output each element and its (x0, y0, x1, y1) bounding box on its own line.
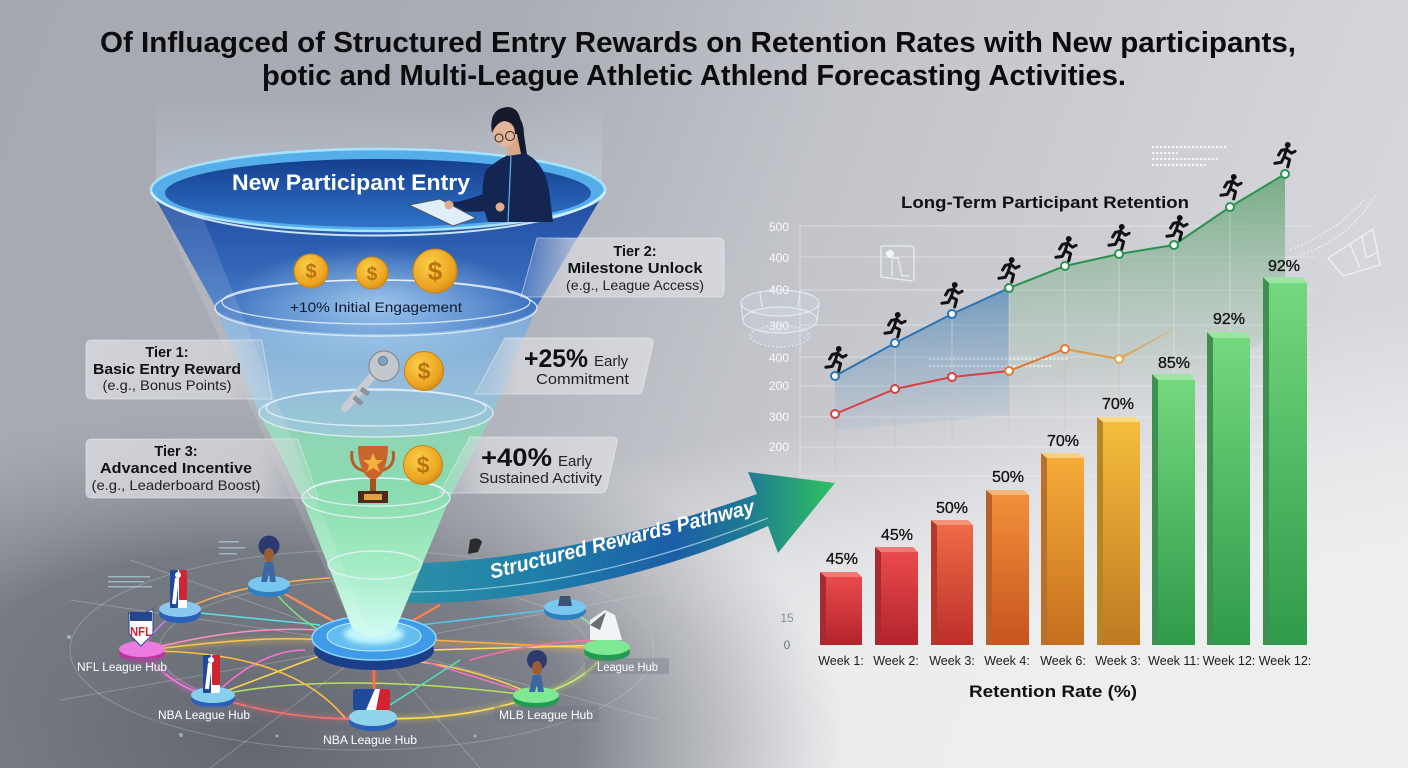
callout: 25 percent: +25% (524, 345, 588, 373)
x axis title: Retention Rate (%) (969, 682, 1137, 701)
runner icons (826, 142, 1295, 371)
axis tick labels: 200 (769, 379, 789, 393)
bar week 9 (1263, 277, 1307, 645)
week axis labels: Week 6: (1040, 654, 1086, 668)
dot sparkles (67, 541, 476, 738)
radar rings (60, 550, 670, 768)
bar value labels: 92% (1268, 258, 1300, 275)
bar value labels: 70% (1102, 396, 1134, 413)
axis tick labels (769, 220, 794, 652)
hub: right green (584, 610, 669, 674)
funnel middle blue section (215, 306, 537, 437)
funnel rim (151, 149, 605, 231)
hub: right green: League Hub (597, 662, 658, 674)
callout: tier 2: Milestone Unlock (568, 261, 704, 277)
panel: retention chart (741, 142, 1380, 701)
axis tick labels: 300 (769, 410, 789, 424)
first tier metric: +10% Initial Engagement (290, 299, 462, 315)
bar week 5 (1041, 453, 1084, 645)
decoration: icon frame (881, 246, 914, 281)
hub: NBA upper (159, 570, 201, 623)
funnel lower green section (259, 413, 493, 636)
bar value labels: 50% (992, 469, 1024, 486)
callout: tier 1: Basic Entry Reward (93, 362, 241, 378)
axis tick labels: 200 (769, 440, 789, 454)
callout: 25 percent: Early (594, 353, 629, 370)
icon: trophy and coin: $ (417, 452, 430, 478)
arrow: structured rewards pathway (407, 472, 835, 603)
bar week 8 (1207, 332, 1250, 645)
bar value labels (826, 258, 1300, 568)
arrow: structured rewards pathway: Structured Rewards Pathway (487, 495, 758, 584)
callout: 40 percent (440, 437, 617, 493)
axis tick labels: 500 (769, 220, 789, 234)
chart grid and axis (800, 226, 1315, 645)
callout: tier 3: (e.g., Leaderboard Boost) (92, 477, 260, 493)
axis tick labels: 400 (769, 251, 789, 265)
axis tick labels: 0 (784, 638, 791, 652)
tier rings (215, 280, 537, 579)
bar chart (820, 277, 1307, 645)
hub: NFL: NFL League Hub (77, 662, 167, 674)
hub: NFL (76, 609, 168, 674)
bar week 7 (1152, 374, 1195, 645)
chart heading: Long-Term Participant Retention (901, 193, 1189, 212)
bar week 3 (931, 520, 973, 645)
bar value labels: 45% (826, 551, 858, 568)
coins: first tier (294, 249, 457, 293)
icon: trophy and coin (352, 446, 442, 503)
axis tick labels: 400 (769, 351, 789, 365)
hub: NBA lower (151, 655, 252, 722)
panel: central funnel (151, 100, 605, 636)
callout: tier 1: (e.g., Bonus Points) (102, 377, 232, 393)
bar value labels: 50% (936, 500, 968, 517)
week axis labels: Week 4: (984, 654, 1030, 668)
week axis labels (818, 654, 1311, 668)
week axis labels: Week 3: (929, 654, 975, 668)
area fills (835, 174, 1285, 470)
axis tick labels: 400 (769, 283, 789, 297)
week axis labels: Week 12: (1259, 654, 1311, 668)
hub: MLB center: NBA League Hub (323, 735, 417, 747)
hub: player right (partly hidden) (468, 538, 586, 620)
bar week 4 (986, 490, 1029, 645)
network of league hubs (60, 541, 670, 768)
callout: tier 1: Tier 1: (145, 345, 189, 361)
callout: tier 2: Tier 2: (613, 244, 657, 260)
week axis labels: Week 1: (818, 654, 864, 668)
callout: 25 percent: Commitment (536, 371, 630, 388)
week axis labels: Week 12: (1203, 654, 1255, 668)
glowing connection lines (142, 640, 607, 719)
callout: tier 1 (86, 340, 272, 399)
title: Of Influagced of Structured Entry Rewards on Retention Rates with New participants, (100, 27, 1296, 59)
funnel heading: New Participant Entry (232, 170, 471, 195)
line chart series (835, 174, 1285, 414)
line markers (831, 170, 1289, 418)
hub: NFL: NFL (130, 624, 152, 639)
week axis labels: Week 11: (1148, 654, 1200, 668)
bar value labels: 70% (1047, 433, 1079, 450)
icon: key and coin: $ (418, 358, 431, 384)
callout: tier 3: Tier 3: (154, 444, 198, 460)
week axis labels: Week 3: (1095, 654, 1141, 668)
funnel centre glow (226, 245, 526, 365)
callout: tier 2 (521, 238, 724, 297)
title (100, 27, 1296, 92)
hub: NBA lower: NBA League Hub (158, 710, 250, 722)
bar value labels: 92% (1213, 311, 1245, 328)
coins: first tier: $ (367, 264, 378, 285)
callout: tier 2: (e.g., League Access) (566, 277, 704, 293)
hub: MLB right: MLB League Hub (499, 710, 593, 722)
icon: key and coin (345, 351, 444, 408)
bar week 1 (820, 572, 862, 645)
title: þotic and Multi-League Athletic Athlend Forecasting Activities. (262, 60, 1126, 92)
funnel side sheen (155, 198, 368, 628)
callout: 40 percent: Sustained Activity (479, 470, 603, 487)
week axis labels: Week 2: (873, 654, 919, 668)
hub: MLB center (319, 689, 422, 747)
rim glow column (156, 100, 602, 190)
bar value labels: 45% (881, 527, 913, 544)
axis tick labels: 300 (769, 319, 789, 333)
callout: 25 percent (475, 338, 653, 394)
decoration: stadium wireframe (741, 290, 819, 347)
funnel upper deep blue section (155, 198, 601, 334)
central hub (312, 616, 436, 670)
callout: 40 percent: Early (558, 453, 593, 470)
coins: first tier: $ (305, 261, 317, 283)
bar week 2 (875, 547, 918, 645)
person with tablet (409, 107, 553, 226)
decoration: map wireframe (1290, 196, 1380, 276)
bar value labels: 85% (1158, 355, 1190, 372)
coins: first tier: $ (428, 256, 443, 286)
hub: MLB right (494, 650, 599, 722)
decoration: dotted legend (929, 147, 1228, 366)
hub: player one (248, 536, 290, 597)
callout: tier 3: Advanced Incentive (100, 461, 252, 477)
callout: 40 percent: +40% (481, 444, 552, 472)
bar week 6 (1097, 417, 1140, 645)
callout: tier 3 (86, 439, 318, 498)
axis tick labels: 15 (780, 611, 794, 625)
